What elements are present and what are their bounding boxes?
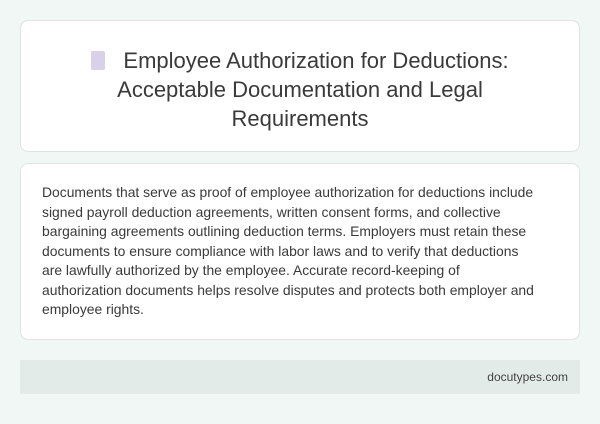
icon: document <box>91 51 105 70</box>
footer <box>20 360 580 394</box>
footer: docutypes.com <box>487 370 568 384</box>
title card <box>20 20 580 152</box>
description card <box>20 163 580 340</box>
title: Employee Authorization for Deductions: Acceptable Documentation and Legal Requirements <box>117 48 509 131</box>
description text: Documents that serve as proof of employee authorization for deductions include signed payroll deduction agreements, written consent forms, and collective bargaining agreements outlining deduction terms. Employers must retain these documents to ensure compliance with labor laws and to verify that deductions are lawfully authorized by the employee. Accurate record-keeping of authorization documents helps resolve disputes and protects both employer and employee rights. <box>42 184 534 317</box>
